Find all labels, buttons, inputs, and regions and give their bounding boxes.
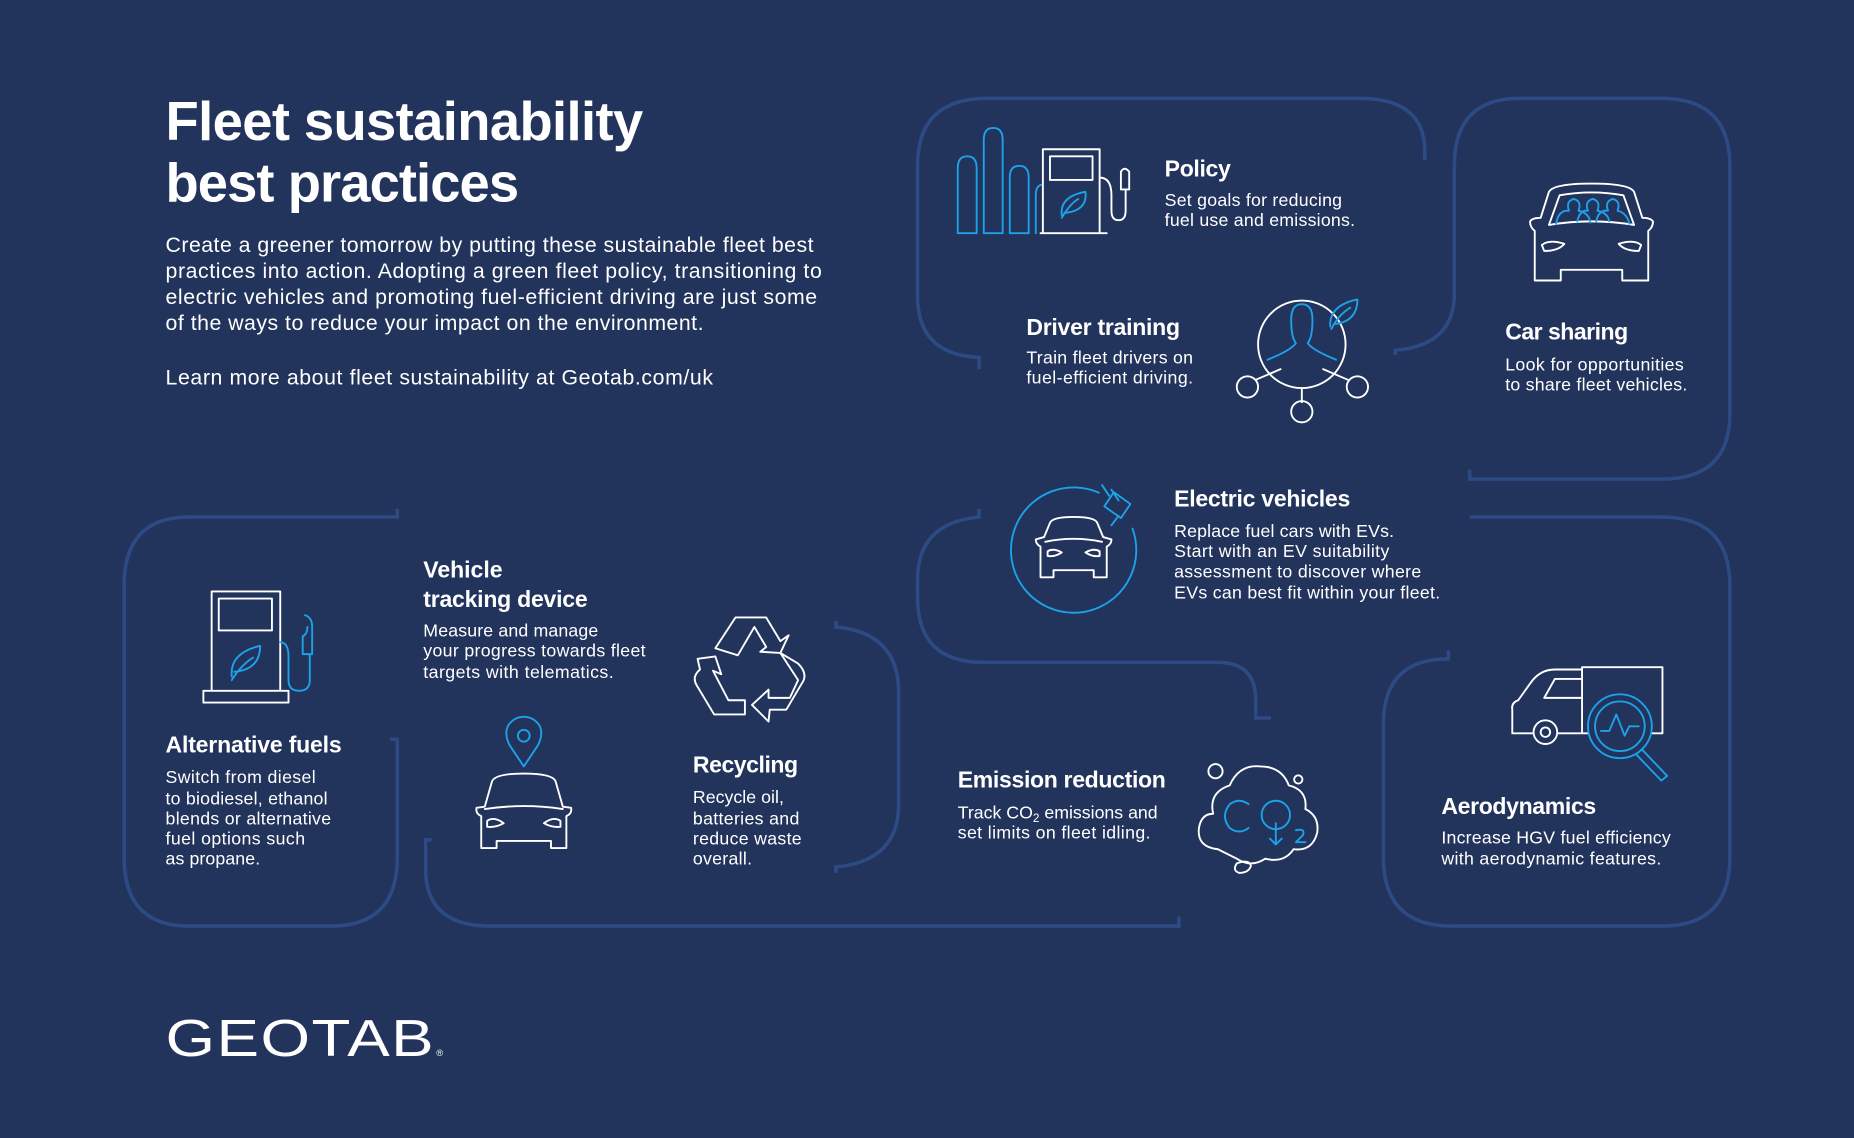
intro text: electric vehicles and promoting fuel-efficient driving are just some: [166, 285, 817, 309]
Car sharing text: Car sharing: [1505, 319, 1628, 345]
Recycling text: batteries and: [693, 808, 799, 828]
icon: car sharing: [1530, 184, 1653, 280]
Electric vehicles text: Replace fuel cars with EVs.: [1174, 521, 1394, 541]
title: [166, 91, 643, 213]
Driver training text: [1026, 314, 1193, 387]
intro text: Create a greener tomorrow by putting these sustainable fleet best: [166, 233, 814, 257]
Recycling text: Recycling: [693, 751, 798, 777]
intro text: Learn more about fleet sustainability at Geotab.com/uk: [166, 366, 713, 390]
intro text: [166, 233, 822, 390]
Driver training text: Driver training: [1026, 314, 1180, 340]
Policy text: Policy: [1165, 155, 1231, 181]
Alternative fuels text: fuel options such: [166, 828, 305, 848]
icon: CO2 cloud: [1199, 764, 1318, 873]
Electric vehicles text: EVs can best fit within your fleet.: [1174, 583, 1440, 603]
Vehicle tracking text: tracking device: [423, 586, 588, 612]
Electric vehicles text: Electric vehicles: [1174, 485, 1350, 511]
Policy text: Set goals for reducing: [1165, 190, 1342, 210]
Recycling text: Recycle oil,: [693, 787, 784, 807]
Electric vehicles text: [1174, 485, 1440, 603]
Car sharing text: [1505, 319, 1687, 394]
Emission reduction text: Emission reduction: [958, 767, 1166, 793]
Vehicle tracking text: your progress towards fleet: [423, 640, 646, 660]
Recycling text: overall.: [693, 849, 752, 869]
Emission reduction text: [958, 767, 1166, 843]
Emission reduction text: emissions and: [1039, 802, 1158, 822]
title: best practices: [166, 152, 519, 213]
icon: driver training: [1237, 299, 1368, 422]
Driver training text: Train fleet drivers on: [1026, 347, 1193, 367]
Aerodynamics text: Aerodynamics: [1441, 793, 1596, 819]
Aerodynamics text: Increase HGV fuel efficiency: [1441, 827, 1671, 847]
Vehicle tracking text: Measure and manage: [423, 620, 598, 640]
logo: GEOTAB: GEOTAB: [166, 1010, 435, 1068]
icon: recycling: [695, 617, 805, 722]
Car sharing text: to share fleet vehicles.: [1505, 374, 1687, 394]
intro text: of the ways to reduce your impact on the environment.: [166, 311, 704, 335]
Alternative fuels text: Switch from diesel: [166, 767, 316, 787]
Electric vehicles text: assessment to discover where: [1174, 561, 1421, 581]
Recycling text: reduce waste: [693, 828, 802, 848]
intro text: practices into action. Adopting a green fleet policy, transitioning to: [166, 259, 822, 283]
icon: tracked car: [476, 717, 571, 848]
icon: electric vehicle: [993, 470, 1154, 630]
Vehicle tracking text: targets with telematics.: [423, 662, 614, 682]
Policy text: [1165, 155, 1355, 230]
icon: aerodynamics: [1512, 667, 1667, 781]
Emission reduction text: Track CO: [958, 802, 1033, 822]
logo: GEOTAB: ®: [436, 1048, 443, 1059]
Emission reduction text: 2: [1033, 811, 1039, 825]
Alternative fuels text: as propane.: [166, 849, 260, 869]
Vehicle tracking text: Vehicle: [423, 556, 503, 582]
Recycling text: [693, 751, 802, 869]
Alternative fuels text: to biodiesel, ethanol: [166, 788, 328, 808]
Driver training text: fuel-efficient driving.: [1026, 367, 1193, 387]
title: Fleet sustainability: [166, 91, 643, 152]
Electric vehicles text: Start with an EV suitability: [1174, 541, 1389, 561]
Car sharing text: Look for opportunities: [1505, 354, 1684, 374]
Emission reduction text: set limits on fleet idling.: [958, 823, 1150, 843]
Alternative fuels text: blends or alternative: [166, 808, 331, 828]
Policy text: fuel use and emissions.: [1165, 210, 1355, 230]
Alternative fuels text: Alternative fuels: [166, 731, 342, 757]
Alternative fuels text: [166, 731, 342, 869]
Vehicle tracking text: [423, 556, 646, 682]
icon: policy: [958, 128, 1129, 233]
outlines: [124, 98, 1730, 926]
icon: alternative fuels: [203, 591, 312, 703]
Aerodynamics text: [1440, 793, 1671, 869]
Aerodynamics text: with aerodynamic features.: [1440, 849, 1661, 869]
